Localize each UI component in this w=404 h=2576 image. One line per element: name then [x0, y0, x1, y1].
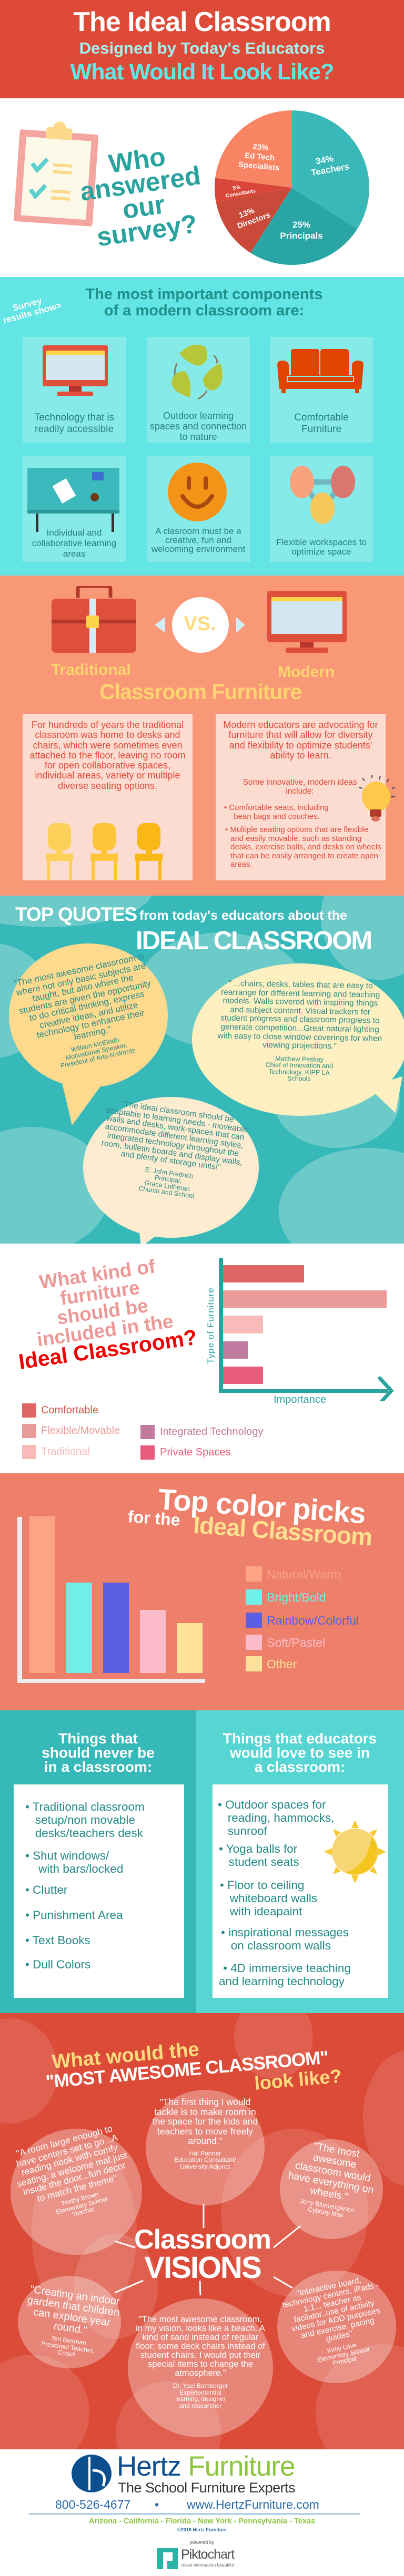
pie chart: Teachers [310, 161, 350, 178]
quote: Jerry Blumengarten: Cybrary Man [307, 2205, 344, 2219]
legend: Other [267, 1657, 297, 1671]
panel: top quotes [0, 896, 404, 1244]
panel: traditional vs modern furniture [0, 576, 404, 896]
heading [15, 904, 371, 955]
quote: Timthy Brown: "A room large enough to have centers set to go...A reading nook with comfy seating, a welcome mat just inside the door...fun decor to match the theme" [15, 2123, 128, 2204]
card: creative [147, 456, 250, 562]
quote bubble: Matthew Peskay: Chief of Innovation and [265, 1061, 333, 1070]
list: love: • Floor to ceiling [220, 1879, 304, 1892]
list: love: • Yoga balls for [219, 1842, 297, 1855]
quote bubble: William McElrath: Motivational Speaker, [65, 1041, 128, 1062]
heading: look like? [254, 2065, 342, 2094]
heading: never: Things that [58, 1730, 138, 1747]
text block: traditional: For hundreds of years the traditional classroom was home to desks and chairs, which were sometimes even attached to the floor, leaving no room for open collaborative spaces, individual areas, variety or multiple diverse seating options. [29, 720, 186, 791]
list: love: • inspirational messages [221, 1926, 349, 1939]
list: never: desks/teachers desk [35, 1826, 143, 1840]
heading: "MOST AWESOME CLASSROOM" [45, 2047, 329, 2092]
icon: sofa [277, 349, 363, 393]
heading: The most important components [85, 286, 323, 303]
contact [55, 2498, 319, 2511]
pie chart: 25% [292, 220, 310, 230]
list: never: • Punishment Area [25, 1908, 123, 1922]
quote bubble: Matthew Peskay: Technology, KIPP LA [268, 1068, 330, 1076]
quote: Hal Portner: University Adjunct [180, 2162, 230, 2170]
heading: who answered our survey: our [120, 189, 167, 224]
card: technology [23, 337, 126, 443]
pie chart: Consultants [225, 188, 256, 199]
heading [127, 1482, 373, 1551]
logo: piktochart: Piktochart [181, 2547, 234, 2562]
quote bubble: E. John Fredrich [83, 1097, 259, 1244]
heading: What kind of [38, 1255, 157, 1293]
heading: who answered our survey [78, 141, 203, 252]
quote bubble: E. John Fredrich: Principal, [154, 1174, 182, 1185]
quote: Kirby Love: Principal [332, 2355, 357, 2367]
heading: classroom furniture: Classroom Furniture [99, 680, 301, 704]
list: never: with bars/locked [38, 1862, 123, 1875]
icon: smiley [168, 463, 227, 521]
quote: Jerry Blumengarten: "The most awesome classroom would have everything on wheels." [287, 2140, 375, 2203]
pie chart: Directors [236, 210, 271, 231]
legend: Integrated Technology [160, 1426, 263, 1438]
legend [22, 1403, 263, 1460]
icon: sun [324, 1820, 386, 1883]
quote bubble: E. John Fredrich: E. John Fredrich [145, 1166, 194, 1180]
icon: lightbulb [359, 775, 396, 822]
quote: Kirby Love: Kirby Love [327, 2341, 357, 2355]
pie chart: Ed Tech [245, 151, 275, 162]
logo: piktochart: powered by [190, 2540, 214, 2545]
list: never: • Text Books [25, 1934, 90, 1947]
quote: Teri Bierman: Teri Bierman [50, 2334, 87, 2346]
icon: vs: VS. [184, 613, 216, 635]
text: A clasroom must be a creative, fun and welcoming environment [152, 526, 245, 554]
heading: included in the [36, 1310, 175, 1351]
list: never: • Dull Colors [25, 1958, 90, 1971]
footer [0, 2449, 404, 2576]
quote: Yael Bamberger: Experientential [179, 2388, 221, 2396]
card: furniture [270, 337, 373, 443]
icon: table [27, 468, 119, 532]
panel: important components [0, 277, 404, 576]
subtitle: Designed by Today's Educators [79, 39, 325, 57]
list: never: • Traditional classroom [25, 1800, 145, 1813]
quote bubble: William McElrath: William McElrath [70, 1036, 120, 1053]
quote: Timthy Brown: Elementary School [55, 2195, 108, 2215]
heading: never: in a classroom: [44, 1759, 152, 1775]
logo: hertz furniture: Hertz Furniture [117, 2451, 295, 2482]
icon: briefcase [52, 586, 136, 653]
quote: Hal Portner: Hal Portner [189, 2150, 221, 2157]
legend: Traditional [41, 1446, 90, 1458]
center title [134, 2224, 271, 2285]
quote bubble: William McElrath: "The most awesome classroom is where not only basic subjects are taught, but also where the students are given the opportunity to do critical thinking, express creative ideas, and utilize technology to enhance their learning." [13, 951, 152, 1042]
heading: for the [127, 1507, 181, 1530]
card: flexible [270, 456, 373, 562]
heading: love: a classroom: [255, 1759, 345, 1775]
heading: love: Things that educators [223, 1730, 377, 1747]
heading [17, 1255, 198, 1374]
quote bubble: Matthew Peskay: Matthew Peskay [275, 1055, 324, 1063]
quote: Jerry Blumengarten: Jerry Blumengarten [299, 2197, 355, 2214]
icon: chairs [46, 823, 163, 880]
heading: What would the [51, 2038, 200, 2073]
quote: Kirby Love: "Interactive board, technology centers, iPads - 1:1... teacher as facilator..use of activity videos for ADD purposes and exercise, pacing guides" [281, 2276, 381, 2344]
logo: hertz furniture: The School Furniture Experts [118, 2480, 295, 2496]
list: never: • Shut windows/ [25, 1849, 109, 1862]
heading: IDEAL CLASSROOM [136, 927, 371, 955]
icon: vs [155, 597, 245, 653]
heading: should be [55, 1295, 149, 1329]
axis label: Importance [274, 1394, 326, 1405]
heading: Ideal Classroom? [17, 1325, 198, 1374]
card: outdoor [147, 337, 250, 443]
icon: molecule [290, 466, 355, 524]
heading: love [223, 1730, 377, 1775]
icon: clipboard [14, 121, 99, 227]
pie chart: 13% [238, 206, 256, 220]
bar chart [17, 1516, 205, 1683]
text: Comfortable [294, 412, 349, 423]
list: never: setup/non movable [35, 1813, 135, 1826]
legend: Flexible/Movable [41, 1425, 120, 1436]
pie chart [215, 110, 369, 265]
text: Individual and collaborative learning areas [32, 528, 116, 559]
header [0, 0, 404, 98]
text block: modern: Modern educators are advocating for furniture that will allow for diversity and flexibility to optimize students' ability to learn. [223, 720, 378, 761]
list: love: on classroom walls [231, 1939, 331, 1952]
contact: 800-526-4677 [55, 2498, 130, 2511]
legend: Comfortable [41, 1404, 98, 1416]
text block: modern [216, 714, 386, 880]
contact: www.HertzFurniture.com [187, 2498, 319, 2511]
heading: modern: Modern [278, 663, 335, 681]
contact: • [155, 2498, 159, 2511]
text block: modern: Some innovative, modern ideas include: [243, 778, 357, 796]
quote: Teri Bierman: "Creating an indoor garden that children can explore year round." [26, 2284, 120, 2336]
heading: Top color picks [157, 1482, 367, 1530]
list: love: whiteboard walls [230, 1892, 317, 1905]
text block: modern: bean bags and couches. [234, 812, 320, 821]
heading: never: should never be [42, 1744, 155, 1761]
text: Furniture [301, 424, 341, 435]
legend: Rainbow/Colorful [267, 1614, 359, 1627]
quote bubble: Matthew Peskay: " ...chairs, desks, tables that are easy to rearrange for different learning and teaching models. Walls covered with inspiring things and subject content. Visual trackers for student progress and classroom progress to generate competition...Great natural lighting with easy to close window coverings for when viewing projections." [217, 979, 382, 1051]
list: love: • 4D immersive teaching [223, 1962, 351, 1975]
pie chart: Specialists [238, 160, 280, 172]
list: love: student seats [229, 1855, 299, 1869]
heading: of a modern classroom are: [104, 302, 304, 319]
footer: ©2016 Hertz Furniture [177, 2527, 227, 2532]
heading: who answered our survey: Who [107, 141, 167, 179]
panel: color picks [0, 1473, 404, 1710]
quote: Teri Bierman: Preschool Teacher, [41, 2339, 95, 2354]
list: love: reading, hammocks, [228, 1811, 334, 1824]
heading: who answered our survey: survey? [95, 209, 199, 252]
quote: Yael Bamberger: "The most awesome classroom, in my vision, looks like a beach. A kind of sand instead of regular floor; some deck chairs instead of student chairs. I would put their special items to change the atmosphere." [136, 2315, 265, 2378]
legend: Soft/Pastel [267, 1636, 325, 1649]
legend: Natural/Warm [267, 1567, 341, 1581]
list: never: • Clutter [25, 1883, 67, 1896]
icon: leaves [171, 345, 223, 399]
quote: Yael Bamberger [136, 2315, 265, 2409]
heading: TOP QUOTES [15, 904, 137, 925]
pie chart: 34% [315, 153, 335, 167]
pie chart: 23% [252, 142, 269, 152]
legend [246, 1566, 359, 1671]
quote bubble: William McElrath: President of Arts-N-Words [60, 1046, 136, 1070]
quote: Teri Bierman: Coach [57, 2348, 76, 2358]
text: Outdoor learning spaces and connection to nature [150, 410, 247, 442]
heading: love: would love to see in [230, 1744, 370, 1761]
quote: Yael Bamberger: and researcher [179, 2402, 221, 2409]
center title: VISIONS [144, 2251, 261, 2285]
heading: who answered our survey: answered [78, 160, 203, 207]
legend: Private Spaces [160, 1446, 231, 1458]
list: never [14, 1784, 184, 1998]
heading: from today's educators about the [139, 908, 347, 923]
quote bubble: E. John Fredrich: "The ideal classroom should be adaptable to learning needs - moveable walls and desks, work-spaces that can accommodate different learning styles, integrated technology throughout the room, bulletin boards and display walls, and plenty of storage units!" [101, 1100, 248, 1172]
quote: Hal Portner: Education Consultant/ [174, 2156, 236, 2163]
card: collaborative [23, 456, 126, 562]
text block: modern: • Multiple seating options that are flexible and easily movable, such as standing desks, exercise balls, and desks on wheels that can be easily arranged to create open areas. [225, 825, 381, 869]
callout: survey results show: results show> [2, 300, 63, 325]
tagline: What Would It Look Like? [70, 59, 334, 85]
logo: piktochart [156, 2540, 248, 2571]
bar chart [206, 1258, 394, 1401]
pie chart: Principals [280, 231, 323, 241]
logo: piktochart: make information beautiful [181, 2562, 234, 2568]
heading: furniture [59, 1277, 141, 1309]
list: love: • Outdoor spaces for [218, 1798, 326, 1811]
quote bubble: Matthew Peskay [192, 963, 404, 1116]
quote bubble: E. John Fredrich: Church and School [138, 1185, 195, 1200]
quote: Hal Portner: "The first thing I would tackle is to make room in the space for the kids and teachers to move freely around." [153, 2097, 258, 2146]
panel: never vs love [0, 1710, 404, 2013]
quote: Timthy Brown: Teacher [72, 2205, 95, 2218]
text [294, 412, 349, 435]
quote: Kirby Love: Elementary School [317, 2345, 370, 2364]
quote: Timthy Brown: Timthy Brown [60, 2190, 99, 2208]
heading [85, 286, 323, 319]
list: love [213, 1784, 388, 1998]
quote: Yael Bamberger: learning, designer [175, 2395, 226, 2403]
heading: traditional: Traditional [51, 661, 131, 679]
panel: survey respondents [0, 98, 404, 277]
quote: Yael Bamberger: Dr. Yael Bamberger [173, 2382, 228, 2389]
quote bubble: E. John Fredrich: Grace Lutheran [144, 1179, 190, 1193]
title: The Ideal Classroom [73, 7, 331, 37]
list: love: sunroof [228, 1824, 267, 1838]
states: Arizona - California - Florida - New York - Pennsylvania - Texas [89, 2517, 315, 2526]
logo: hertz furniture [72, 2451, 295, 2496]
text: Technology that is readily accessible [34, 412, 114, 435]
icon: monitor [43, 345, 108, 396]
pie chart: 5% [233, 184, 241, 191]
text block: traditional [23, 714, 193, 880]
text block: modern: • Comfortable seats, including [224, 803, 329, 812]
callout: survey results show: Survey [12, 296, 43, 313]
legend: Bright/Bold [267, 1590, 326, 1604]
center title: Classroom [134, 2224, 271, 2255]
list: love: with ideapaint [230, 1905, 302, 1918]
quote bubble: Matthew Peskay: Schools [287, 1075, 311, 1083]
panel: furniture chart [0, 1244, 404, 1473]
icon: monitor [267, 591, 347, 653]
quote bubble: William McElrath [9, 943, 168, 1125]
quote: Hal Portner [153, 2097, 258, 2170]
list: love: and learning technology [219, 1975, 345, 1988]
bar chart: Type of Furniture [206, 1287, 216, 1364]
heading: Ideal Classroom [193, 1511, 373, 1551]
panel: classroom visions [0, 2013, 404, 2449]
heading: never [42, 1730, 155, 1775]
text: Flexible workspaces to optimize space [276, 537, 367, 557]
